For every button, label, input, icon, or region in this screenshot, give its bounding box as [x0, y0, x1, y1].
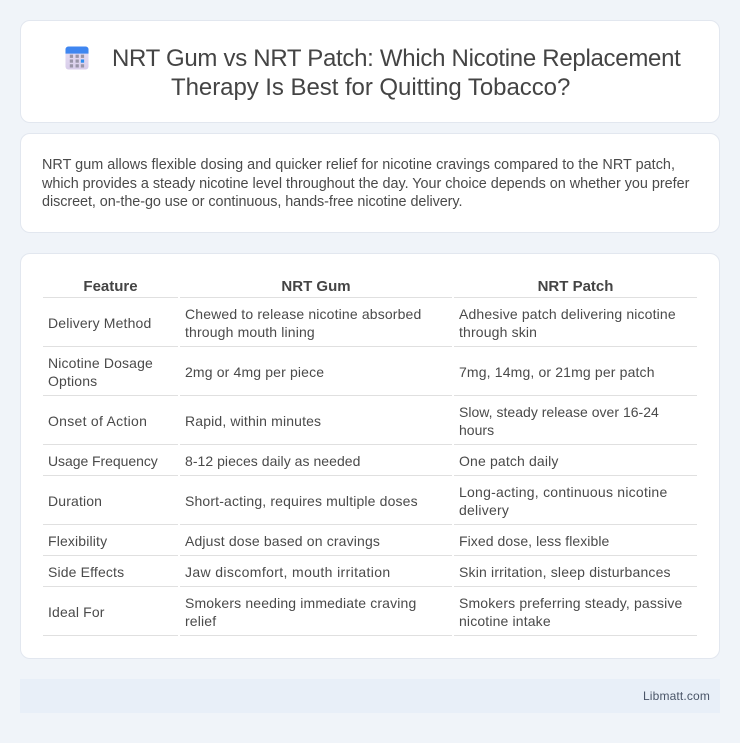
- row: usage frequency: [43, 453, 697, 476]
- text: Onset of Action: [48, 413, 147, 429]
- text: Chewed to release nicotine absorbed: [185, 306, 421, 322]
- text: Short-acting, requires multiple doses: [185, 493, 418, 509]
- summary text: discreet, on-the-go use or continuous, hands-free nicotine delivery.: [42, 194, 462, 210]
- title: Therapy Is Best for Quitting Tobacco?: [171, 74, 570, 101]
- table header: [43, 278, 697, 298]
- text: Nicotine Dosage: [48, 355, 153, 371]
- row: delivery method: [43, 306, 697, 347]
- footer credit: Libmatt.com: [643, 689, 710, 703]
- text: hours: [459, 422, 494, 438]
- text: delivery: [459, 502, 509, 518]
- text: 2mg or 4mg per piece: [185, 364, 324, 380]
- text: Rapid, within minutes: [185, 413, 321, 429]
- text: Duration: [48, 493, 102, 509]
- comparison table: [43, 278, 697, 636]
- text: Skin irritation, sleep disturbances: [459, 564, 671, 580]
- text: Side Effects: [48, 564, 124, 580]
- row: duration: [43, 484, 697, 525]
- text: Fixed dose, less flexible: [459, 533, 609, 549]
- text: Flexibility: [48, 533, 107, 549]
- text: through mouth lining: [185, 324, 315, 340]
- text: Ideal For: [48, 604, 105, 620]
- text: nicotine intake: [459, 613, 551, 629]
- footer bar: [20, 679, 720, 713]
- row: side effects: [43, 564, 697, 587]
- text: NRT Gum: [281, 278, 351, 295]
- icon: calendar grid: [65, 46, 89, 70]
- text: Slow, steady release over 16-24: [459, 404, 659, 420]
- text: Usage Frequency: [48, 453, 158, 469]
- title: [112, 45, 681, 101]
- text: One patch daily: [459, 453, 559, 469]
- text: Delivery Method: [48, 315, 151, 331]
- title: NRT Gum vs NRT Patch: Which Nicotine Replacement: [112, 45, 681, 72]
- text: Options: [48, 373, 97, 389]
- row: onset of action: [43, 404, 697, 445]
- text: relief: [185, 613, 216, 629]
- text: Smokers needing immediate craving: [185, 595, 416, 611]
- text: NRT Patch: [538, 278, 613, 295]
- text: Adjust dose based on cravings: [185, 533, 380, 549]
- summary text: which provides a steady nicotine level throughout the day. Your choice depends on whether you prefer: [42, 176, 689, 192]
- text: 7mg, 14mg, or 21mg per patch: [459, 364, 655, 380]
- text: Jaw discomfort, mouth irritation: [185, 564, 391, 580]
- text: Feature: [83, 278, 138, 295]
- summary text: NRT gum allows flexible dosing and quicker relief for nicotine cravings compared to the NRT patch,: [42, 157, 675, 173]
- row: ideal for: [43, 595, 697, 636]
- text: Smokers preferring steady, passive: [459, 595, 682, 611]
- text: Long-acting, continuous nicotine: [459, 484, 668, 500]
- panel: comparison table card: [20, 253, 720, 659]
- panel: summary card: [20, 133, 720, 233]
- panel: title card: [20, 20, 720, 123]
- row: flexibility: [43, 533, 697, 556]
- text: Adhesive patch delivering nicotine: [459, 306, 676, 322]
- text: through skin: [459, 324, 537, 340]
- summary text: [42, 157, 690, 210]
- text: 8-12 pieces daily as needed: [185, 453, 360, 469]
- row: nicotine dosage options: [43, 355, 697, 396]
